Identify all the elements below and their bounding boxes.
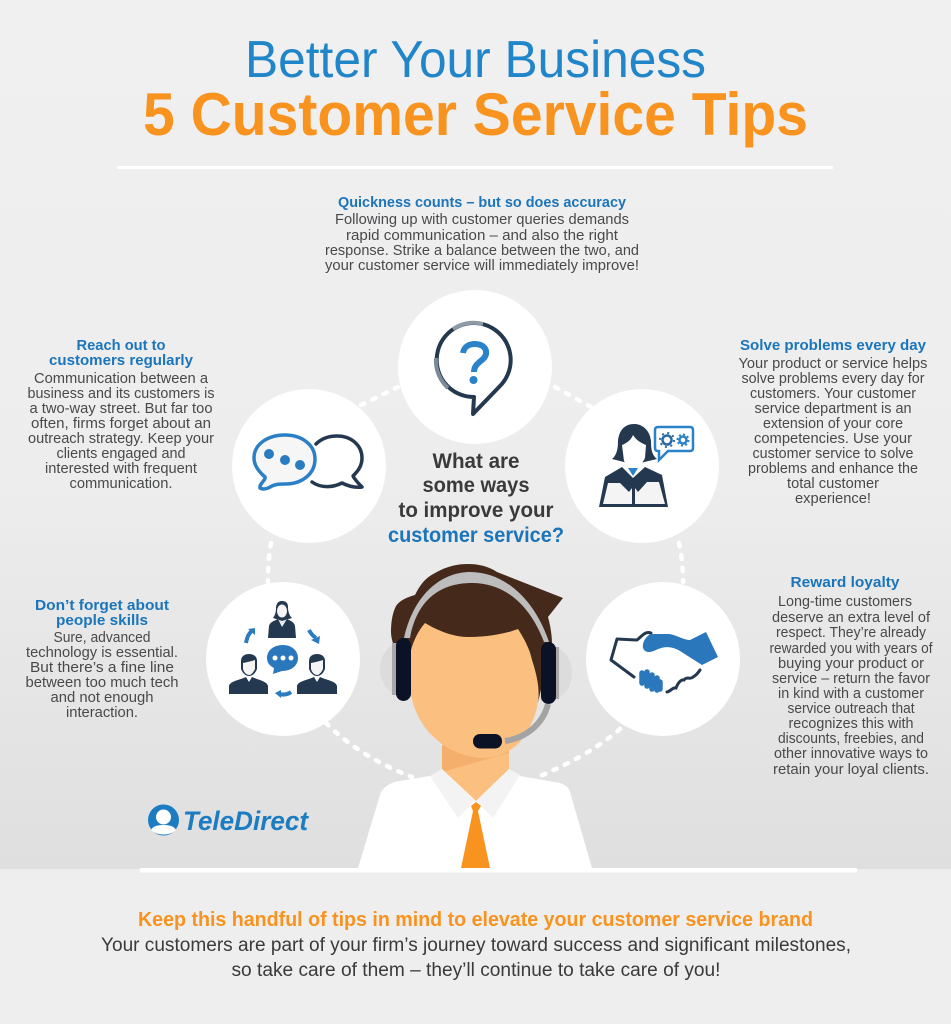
panel: top tip text: response. Strike a balance between the two, and: [325, 243, 639, 259]
central question: to improve your: [398, 499, 554, 522]
panel: right tip text: extension of your core: [763, 416, 903, 432]
icon: question bubble circle: [398, 290, 552, 444]
title: Better Your Business: [245, 31, 706, 89]
central question: some ways: [422, 474, 530, 497]
footer text: Your customers are part of your firm’s journey toward success and significant milestones,: [101, 935, 851, 956]
panel: lower-right tip text: Long-time customers: [778, 594, 912, 610]
central question: [388, 450, 564, 547]
collar: [430, 769, 520, 818]
panel: right tip text: customer service to solve: [752, 446, 914, 462]
panel: lower-right tip text: buying your product or: [778, 656, 924, 672]
panel: top tip text: rapid communication – and also the right: [346, 228, 618, 244]
panel: top tip text: Following up with customer queries demands: [335, 212, 629, 228]
icon: support agent circle: [565, 389, 719, 543]
panel: lower-left tip text: technology is essential.: [26, 645, 178, 661]
connector dots: [268, 387, 683, 777]
icon: handshake circle: [586, 582, 740, 736]
panel: left tip text: interested with frequent: [45, 461, 197, 477]
panel: right tip text: competencies. Use your: [754, 431, 912, 447]
panel: right tip text: Your product or service helps: [738, 356, 928, 372]
panel: top tip text: [325, 194, 639, 274]
panel: lower-left tip text: interaction.: [66, 705, 138, 721]
panel: left tip text: Reach out to: [76, 337, 166, 354]
central question: What are: [432, 450, 520, 473]
neck: [442, 745, 509, 801]
logo: TeleDirect: [183, 806, 309, 836]
panel: left tip text: business and its customers is: [28, 386, 214, 402]
panel: right tip text: problems and enhance the: [748, 461, 918, 477]
mic: [473, 734, 502, 748]
panel: lower-left tip text: [26, 597, 178, 721]
headband: [404, 572, 549, 642]
footer text: Keep this handful of tips in mind to elevate your customer service brand: [138, 909, 813, 931]
footer background: [0, 869, 951, 1024]
mic arm: [505, 704, 548, 741]
tie: [461, 802, 490, 868]
panel: lower-left tip text: But there’s a fine line: [30, 660, 174, 676]
title: [143, 31, 808, 148]
panel: left tip text: Communication between a: [34, 371, 209, 387]
shirt: [358, 776, 592, 868]
panel: top tip text: Quickness counts – but so does accuracy: [338, 194, 627, 211]
hair: [391, 564, 563, 702]
illustration: agent with headset: [358, 564, 592, 868]
panel: left tip text: a two-way street. But far too: [30, 401, 213, 417]
icon: team meeting circle: [206, 582, 360, 736]
panel: lower-right tip text: in kind with a customer: [778, 686, 924, 702]
panel: top tip text: your customer service will immediately improve!: [325, 258, 639, 274]
title: 5 Customer Service Tips: [143, 81, 808, 148]
panel: left tip text: [28, 337, 214, 492]
panel: lower-right tip text: other innovative ways to: [774, 746, 928, 762]
panel: left tip text: communication.: [70, 476, 172, 492]
icon: chat bubbles circle: [232, 389, 386, 543]
panel: lower-right tip text: deserve an extra level of: [772, 610, 931, 626]
footer text: [101, 909, 851, 981]
panel: lower-left tip text: Don’t forget about: [35, 597, 169, 614]
footer text: so take care of them – they’ll continue to take care of you!: [232, 960, 720, 981]
panel: right tip text: customers. Your customer: [750, 386, 916, 402]
panel: right tip text: service department is an: [754, 401, 912, 417]
panel: left tip text: outreach strategy. Keep your: [28, 431, 214, 447]
headset shadow: [380, 641, 572, 701]
panel: right tip text: Solve problems every day: [740, 337, 927, 354]
panel: lower-right tip text: service outreach that: [788, 701, 914, 717]
panel: right tip text: experience!: [795, 491, 871, 507]
ear cup shading: [392, 643, 559, 699]
panel: left tip text: clients engaged and: [56, 446, 186, 462]
panel: left tip text: often, firms forget about an: [31, 416, 211, 432]
panel: right tip text: [738, 337, 928, 507]
panel: lower-right tip text: retain your loyal clients.: [773, 762, 929, 778]
face: [409, 623, 539, 758]
panel: lower-right tip text: recognizes this with: [788, 716, 914, 732]
panel: lower-right tip text: respect. They’re already: [776, 625, 927, 641]
panel: lower-right tip text: Reward loyalty: [790, 574, 900, 591]
panel: lower-right tip text: discounts, freebies, and: [778, 731, 924, 747]
panel: right tip text: solve problems every day for: [742, 371, 925, 387]
ear cups: [396, 638, 556, 704]
panel: lower-left tip text: Sure, advanced: [54, 630, 150, 646]
central question: customer service?: [388, 524, 564, 547]
panel: lower-right tip text: [770, 574, 933, 778]
panel: lower-right tip text: rewarded you with years of: [770, 641, 933, 657]
panel: right tip text: total customer: [787, 476, 879, 492]
panel: left tip text: customers regularly: [49, 352, 194, 369]
panel: lower-left tip text: between too much tech: [26, 675, 178, 691]
panel: lower-left tip text: people skills: [56, 612, 148, 629]
panel: lower-right tip text: service – return the favor: [772, 671, 930, 687]
panel: lower-left tip text: and not enough: [50, 690, 154, 706]
